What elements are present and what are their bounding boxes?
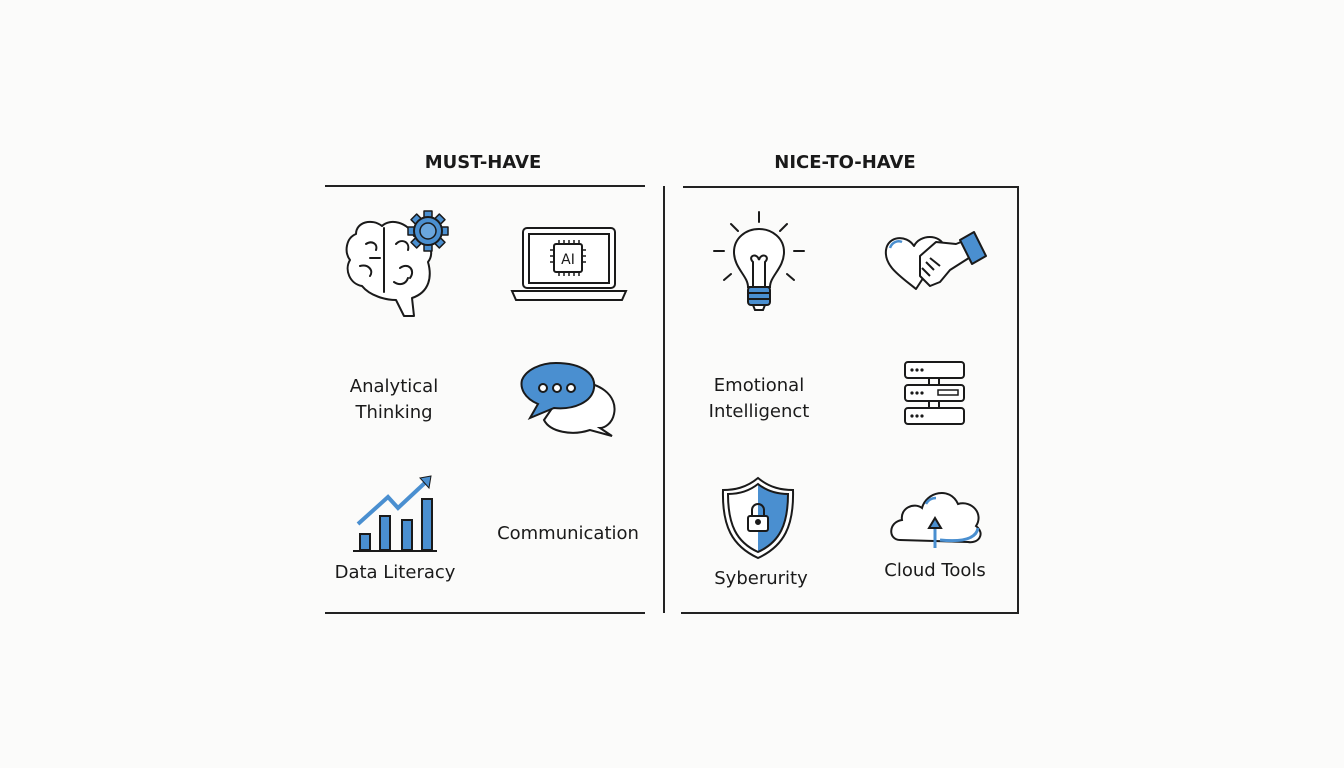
icon: light bulb xyxy=(714,212,804,310)
icon: laptop AI: AI xyxy=(561,252,575,268)
icon: cloud upload xyxy=(891,493,981,548)
icon: bar chart xyxy=(353,476,437,551)
icon: brain with gear xyxy=(347,211,448,316)
icon: chat bubbles xyxy=(522,363,615,436)
icon: laptop AI xyxy=(512,228,626,300)
panel: nice-to-have xyxy=(681,187,1018,613)
text: analytical thinking: Thinking xyxy=(354,402,433,423)
heading: must-have: MUST-HAVE xyxy=(425,152,541,173)
heading: nice-to-have: NICE-TO-HAVE xyxy=(774,152,916,173)
text: emotional intelligenct: Intelligenct xyxy=(709,401,809,422)
text: analytical thinking: Analytical xyxy=(350,376,438,397)
text: communication: Communication xyxy=(497,523,639,544)
icon: shield lock xyxy=(723,478,793,558)
panel: must-have xyxy=(325,186,645,613)
text: syberurity: Syberurity xyxy=(714,568,808,589)
text: emotional intelligenct: Emotional xyxy=(714,375,804,396)
text: data literacy: Data Literacy xyxy=(335,562,456,583)
icon: heart handshake xyxy=(886,232,986,289)
icon: server xyxy=(905,362,964,424)
text: cloud tools: Cloud Tools xyxy=(884,560,986,581)
